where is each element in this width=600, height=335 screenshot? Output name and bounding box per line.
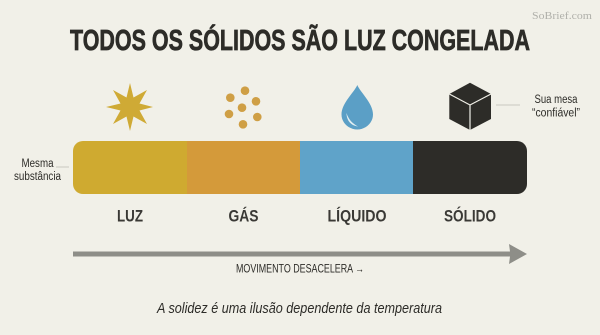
label: light: LUZ bbox=[117, 207, 143, 226]
callout: your table: Sua mesa bbox=[534, 94, 578, 106]
callout: your table: “confiável” bbox=[532, 108, 580, 120]
callout: same substance: Mesma bbox=[22, 158, 54, 170]
icon: gas particles bbox=[225, 86, 262, 129]
state bar bbox=[73, 141, 527, 194]
arrow bbox=[73, 244, 527, 264]
icon: star bbox=[106, 83, 153, 131]
label: liquid: LÍQUIDO bbox=[328, 207, 386, 226]
callout: same substance bbox=[14, 158, 69, 183]
icon: water drop bbox=[342, 85, 373, 130]
watermark: SoBrief.com bbox=[532, 10, 592, 22]
callout: same substance: substância bbox=[14, 171, 62, 183]
arrow label: MOVIMENTO DESACELERA → bbox=[236, 264, 364, 276]
label: gas: GÁS bbox=[228, 207, 258, 226]
icon: cube bbox=[449, 83, 491, 130]
caption: A solidez é uma ilusão dependente da temperatura bbox=[156, 300, 442, 317]
label: solid: SÓLIDO bbox=[444, 207, 496, 226]
callout: your table bbox=[496, 94, 580, 120]
